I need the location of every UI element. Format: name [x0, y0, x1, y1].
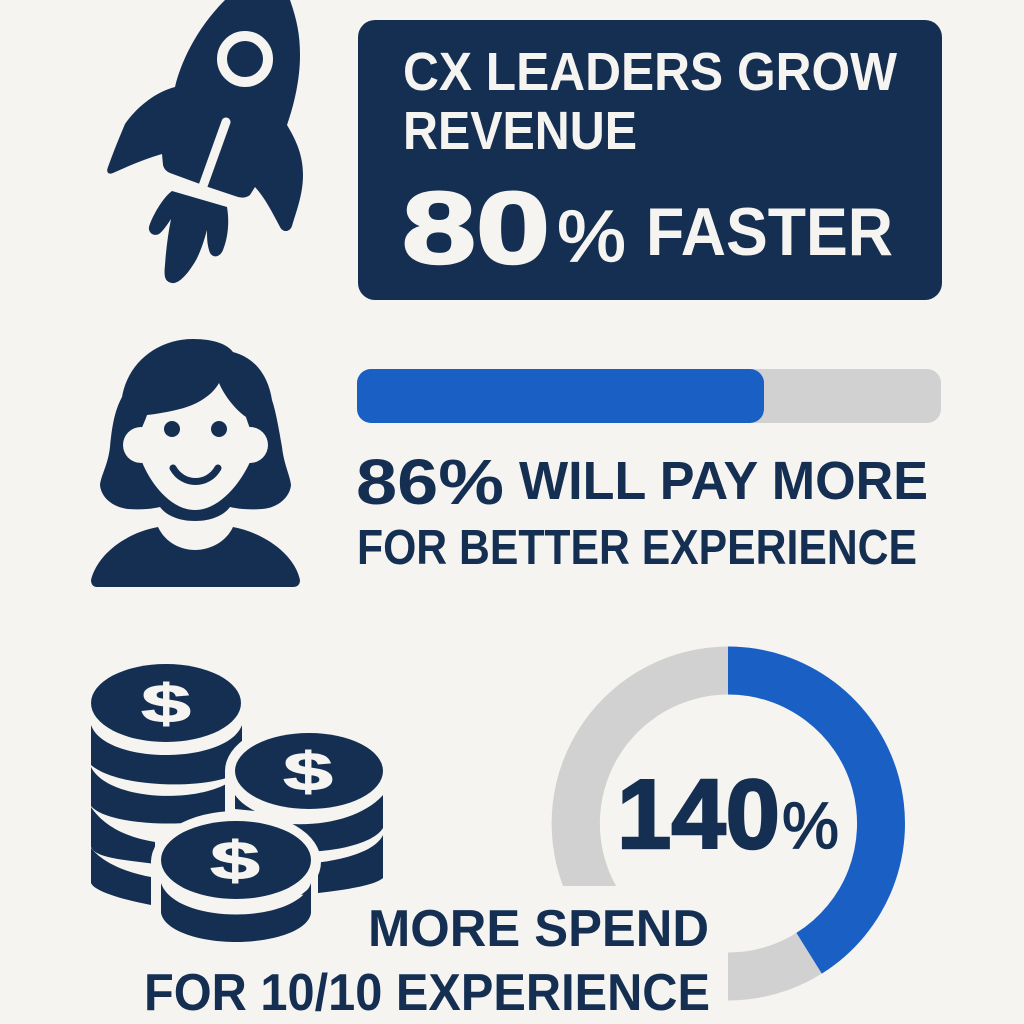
text: more spend: MORE SPEND — [368, 900, 709, 958]
progress bar — [357, 369, 941, 423]
icon: person — [91, 339, 300, 587]
front coin — [151, 811, 321, 913]
heading: faster: FASTER — [646, 194, 893, 270]
icon: rocket — [107, 0, 303, 283]
panel: headline — [358, 20, 942, 300]
stat: percent sign: % — [557, 197, 626, 277]
top coin — [91, 664, 241, 742]
text: for better experience: FOR BETTER EXPERIENCE — [357, 521, 917, 575]
text: will pay more: WILL PAY MORE — [519, 451, 928, 511]
donut chart — [552, 646, 905, 1000]
right stack — [225, 721, 393, 821]
icon: coin stacks: $ — [141, 673, 191, 734]
stat: percent sign: % — [782, 788, 839, 862]
stat: 140: 140 — [617, 759, 780, 869]
left stack — [91, 725, 242, 905]
icon: coin stacks: $ — [283, 741, 333, 802]
heading: revenue: REVENUE — [403, 101, 637, 161]
text: for 10/10 experience: FOR 10/10 EXPERIENCE — [144, 964, 710, 1022]
stat: 86 percent: 86% — [356, 446, 504, 518]
icon: coin stacks: $ — [210, 830, 260, 891]
heading: CX leaders grow: CX LEADERS GROW — [403, 42, 897, 102]
stat: 80: 80 — [402, 171, 550, 285]
icon: coin stacks — [91, 664, 393, 942]
